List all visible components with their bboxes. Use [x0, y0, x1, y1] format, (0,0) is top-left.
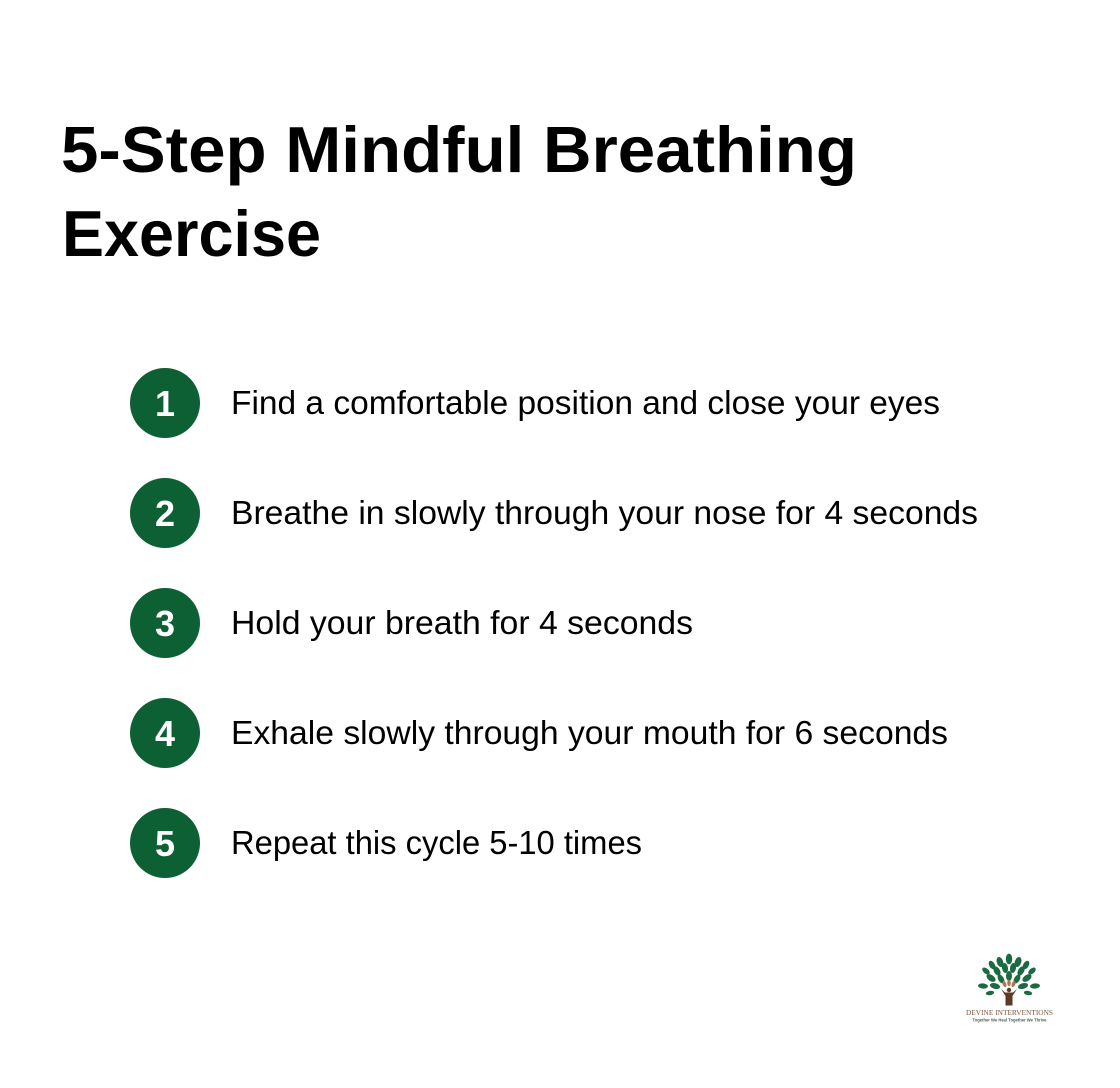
step 4: [130, 698, 948, 768]
title: 5-Step Mindful Breathing: [61, 113, 857, 186]
step 1: [130, 368, 940, 438]
step 5: 5: [155, 823, 175, 864]
title: Exercise: [62, 197, 321, 270]
step 2: [130, 478, 978, 548]
logo tagline: Together We Heal Together We Thrive: [972, 1018, 1047, 1024]
step 2: 2: [155, 493, 175, 534]
icon: figure trunk: [1001, 989, 1017, 1006]
step 5: Repeat this cycle 5-10 times: [231, 824, 642, 861]
logo name: DEVINE INTERVENTIONS: [966, 1009, 1053, 1017]
step 3: [130, 588, 693, 658]
step 4: 4: [155, 713, 175, 754]
step 3: Hold your breath for 4 seconds: [231, 604, 693, 641]
logo: Devine Interventions tree: [966, 954, 1053, 1024]
title: [61, 113, 857, 270]
step 4: Exhale slowly through your mouth for 6 seconds: [231, 714, 948, 751]
step 3: 3: [155, 603, 175, 644]
step 1: 1: [155, 383, 175, 424]
icon: tree leaves: [978, 954, 1040, 996]
step 2: Breathe in slowly through your nose for 4 seconds: [231, 494, 978, 531]
step 5: [130, 808, 642, 878]
step 1: Find a comfortable position and close your eyes: [231, 384, 940, 421]
